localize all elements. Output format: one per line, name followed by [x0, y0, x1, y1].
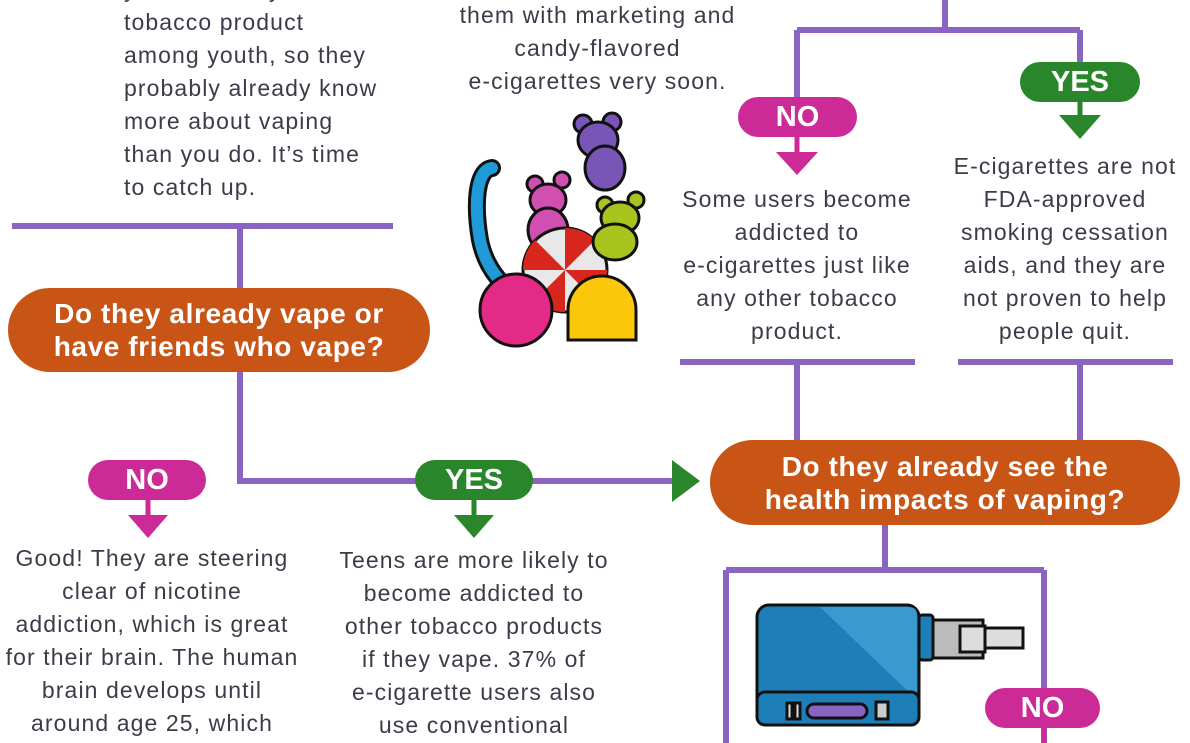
text: NO left: Good! They are steering: [16, 545, 288, 571]
text: YES mid: other tobacco products: [345, 613, 603, 639]
text: YES mid: become addicted to: [364, 580, 584, 606]
text: YES mid: if they vape. 37% of: [362, 646, 586, 672]
text: NO right: any other tobacco: [696, 285, 898, 311]
label: NO bottom right: [985, 688, 1100, 728]
text: top-middle: candy-flavored: [514, 35, 681, 61]
heading: already vape question: have friends who vape?: [54, 331, 384, 362]
text: top-left: [124, 0, 377, 200]
label: YES right: [1020, 62, 1140, 102]
heading: already vape question: Do they already vape or: [54, 298, 384, 329]
text: NO right: [682, 186, 912, 344]
text: YES right: people quit.: [999, 318, 1131, 344]
text: NO left: clear of nicotine: [62, 578, 242, 604]
text: NO right: Some users become: [682, 186, 912, 212]
text: YES mid: [339, 547, 609, 738]
label: NO right: [738, 97, 857, 137]
label: YES mid: [415, 460, 533, 500]
text: top-left: more about vaping: [124, 108, 333, 134]
text: YES mid: Teens are more likely to: [339, 547, 609, 573]
text: top-left: than you do. It’s time: [124, 141, 360, 167]
text: YES right: FDA-approved: [984, 186, 1146, 212]
text: NO right: product.: [751, 318, 843, 344]
text: top-left: among youth, so they: [124, 42, 366, 68]
text: top-left: tobacco product: [124, 9, 304, 35]
text: NO left: [6, 545, 298, 736]
text: NO right: e-cigarettes just like: [683, 252, 911, 278]
text: NO left: brain develops until: [42, 677, 262, 703]
heading: already vape question: [8, 288, 430, 372]
label: NO right: NO: [776, 101, 819, 133]
text: YES mid: use conventional: [379, 712, 569, 738]
label: YES mid: YES: [445, 464, 503, 496]
text: top-left: probably already know: [124, 75, 377, 101]
label: NO left: [88, 460, 206, 500]
text: YES mid: e-cigarette users also: [352, 679, 596, 705]
text: top-middle: them with marketing and: [460, 2, 735, 28]
text: top-left: to catch up.: [124, 174, 256, 200]
text: YES right: [954, 153, 1176, 344]
text: YES right: aids, and they are: [964, 252, 1166, 278]
label: YES right: YES: [1051, 66, 1109, 98]
text: NO left: for their brain. The human: [6, 644, 298, 670]
heading: health impacts question: Do they already see the: [782, 450, 1108, 482]
label: NO bottom right: NO: [1021, 692, 1064, 724]
text: top-middle: [460, 2, 735, 94]
text: YES right: not proven to help: [963, 285, 1167, 311]
text: YES right: smoking cessation: [961, 219, 1169, 245]
text: top-middle: e-cigarettes very soon.: [469, 68, 726, 94]
label: NO left: NO: [125, 464, 169, 496]
text: NO right: addicted to: [735, 219, 859, 245]
heading: health impacts question: [710, 440, 1180, 525]
heading: health impacts question: health impacts of vaping?: [765, 484, 1125, 514]
text: NO left: around age 25, which: [31, 710, 273, 736]
text: YES right: E-cigarettes are not: [954, 153, 1176, 179]
text: NO left: addiction, which is great: [16, 611, 288, 637]
